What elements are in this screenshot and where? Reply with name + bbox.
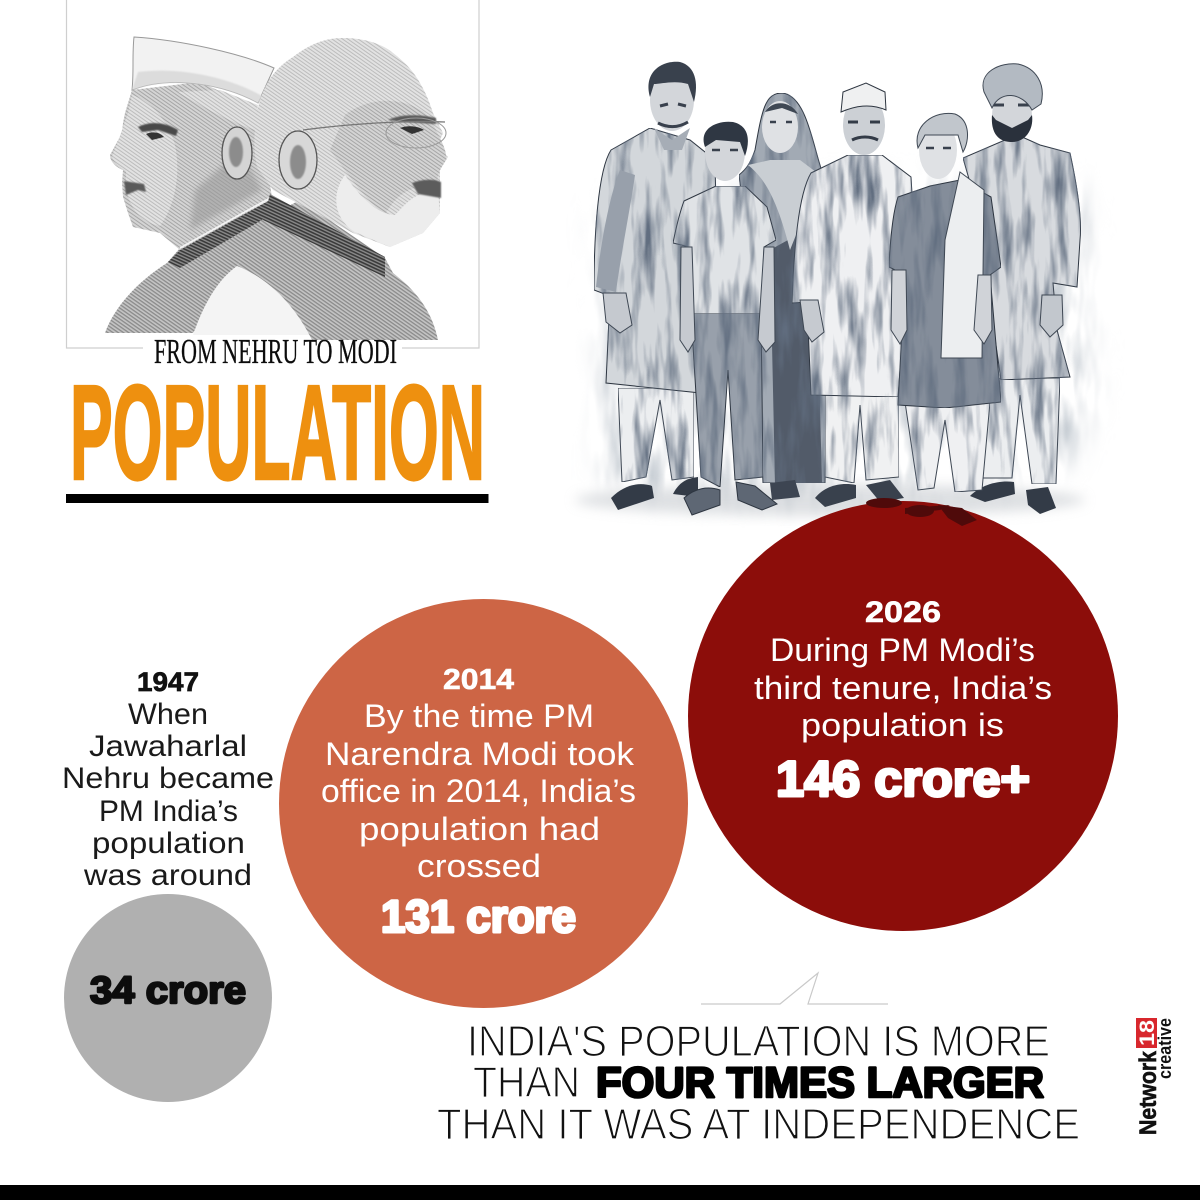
2026 year: 2026 [865,596,941,629]
Modi glasses [303,122,445,130]
watercolor illustration: family of six [575,62,1095,516]
girl with dupatta [889,113,1001,492]
conclusion text: THAN [473,1058,580,1107]
2026 description: During PM Modi’s [770,632,1035,668]
logo: Network18 creative: creative [1155,1018,1175,1079]
1947 description: PM India’s [99,795,238,828]
logo: Network18 creative: Network [1135,1050,1162,1135]
2026 value: 146 crore+ [776,751,1030,807]
logo: Network18 creative [1135,1018,1175,1135]
conclusion text [437,1017,1080,1149]
1947 description [62,698,274,892]
2014 description: office in 2014, India’s [321,773,636,809]
1947 value: 34 crore [90,970,246,1012]
Modi face shading [330,101,446,215]
subtitle: FROM NEHRU TO MODI [154,332,397,371]
1947 year: 1947 [137,667,199,697]
1947 description: population [92,827,245,860]
shoes [611,484,654,510]
2026 description: third tenure, India’s [754,670,1052,706]
Modi head [254,38,448,247]
Modi ear [279,131,317,189]
1947 description: When [128,698,208,731]
title rule [66,494,488,503]
2014 description: By the time PM [364,698,594,734]
Nehru portrait [105,37,312,335]
boy in shirt [673,122,777,515]
engraved portrait: Nehru and Modi [105,37,448,340]
2014 description [321,698,636,884]
watercolor wash [600,183,1095,496]
conclusion text: INDIA'S POPULATION IS MORE [467,1017,1050,1066]
Nehru ear [222,127,252,179]
portrait frame [66,0,479,348]
circle: 1947 [64,894,272,1102]
woman in saree [739,93,830,500]
Nehru face [110,82,272,250]
man at far left [594,62,720,510]
circle: 2026 [688,498,1118,931]
ground shadow [575,484,1085,516]
2014 description: crossed [417,848,541,884]
2014 value: 131 crore [381,891,576,942]
man in cap [792,83,918,507]
circle: 2014 [279,599,688,1008]
1947 text block [62,667,274,892]
2014 description: Narendra Modi took [325,736,635,772]
Nehru cap [132,37,274,103]
bottom bar [0,1185,1200,1200]
Modi collar [263,194,385,277]
logo: Network18 creative: 18 [1136,1020,1159,1046]
man in turban [963,64,1081,514]
2014 description: population had [359,811,600,847]
ink drips at feet [866,498,977,526]
Modi jacket [237,200,438,340]
Modi portrait [237,38,448,340]
2026 description [754,632,1052,743]
conclusion text: THAN IT WAS AT INDEPENDENCE [437,1100,1080,1149]
1947 description: was around [83,859,252,892]
infographic canvas: POPULATION [70,357,485,508]
face and hands [603,293,632,333]
2026 description: population is [801,707,1004,743]
2014 year: 2014 [443,664,514,696]
speech pointer line [701,973,888,1004]
1947 description: Nehru became [62,762,274,795]
Nehru collar line [180,198,270,248]
highlighted phrase: FOUR TIMES LARGER [596,1059,1044,1107]
white kurta between shoulders [193,266,312,335]
1947 description: Jawaharlal [89,730,247,763]
Nehru jacket [105,200,270,333]
